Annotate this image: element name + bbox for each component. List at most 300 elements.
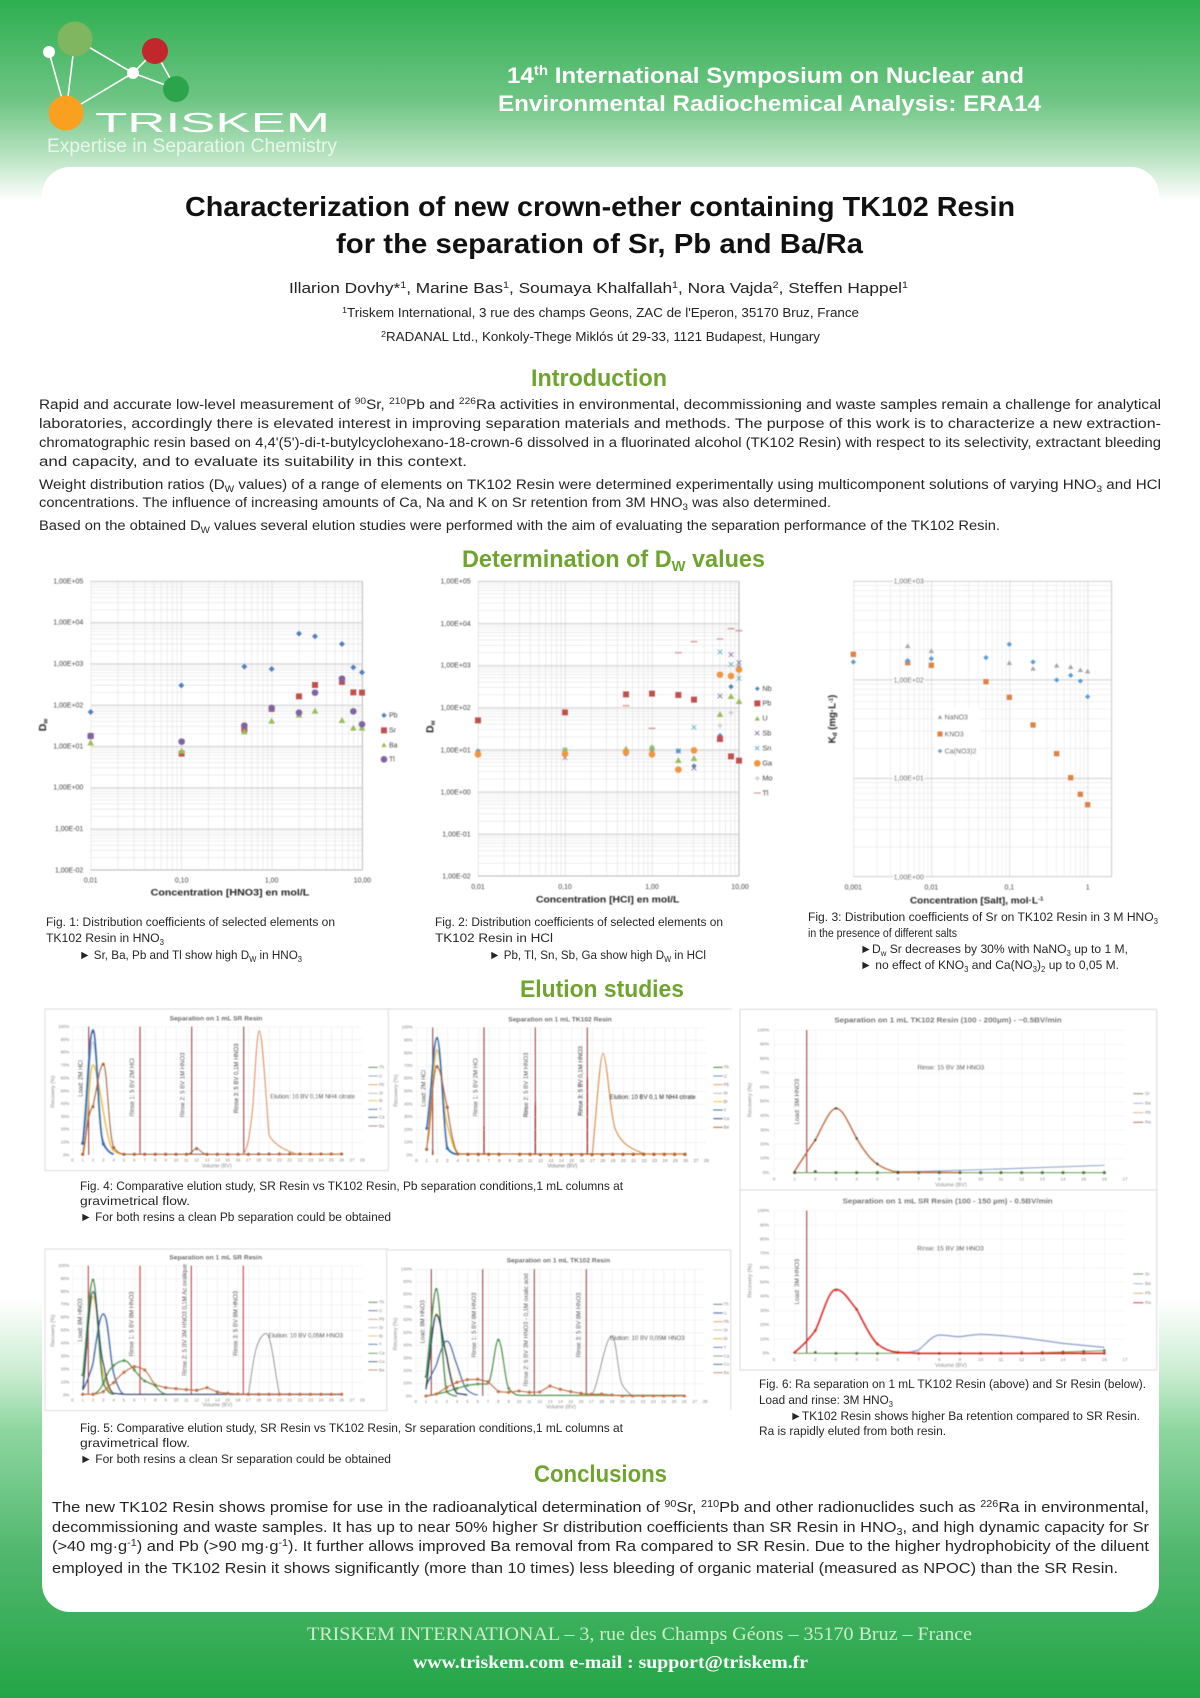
chart: figure 5 TK102 Resin Sr separation: 15	[568, 1399, 574, 1404]
conclusions text: employed in the TK102 Resin it shows significantly (more than 10 times) less bleeding of organic material (measured as NPOC) than the SR Resin.	[52, 1560, 1118, 1577]
authors and affiliations: Illarion Dovhy*	[289, 281, 382, 297]
chart: figure 1 HNO3 distribution: 10,00	[354, 878, 371, 885]
chart: figure 5 TK102 Resin Sr separation: Bi	[724, 1336, 728, 1341]
caption: figure 6: 3	[889, 1400, 894, 1409]
chart: figure 6 radium separation on two resins: 4	[855, 1176, 858, 1181]
chart: figure 5 TK102 Resin Sr separation: 40%	[403, 1343, 412, 1348]
chart: figure 3 salt influence: (mg·L	[827, 703, 838, 732]
chart: figure 5 TK102 Resin Sr separation: 20	[620, 1399, 625, 1404]
chart: figure 5 TK102 Resin Sr separation: 10%	[403, 1381, 412, 1386]
chart: figure 5 TK102 Resin Sr separation: Th	[724, 1302, 729, 1307]
chart: figure 3 salt influence: 0,01	[925, 884, 938, 891]
heading: Conclusions: Conclusions	[534, 1461, 667, 1488]
chart: figure 5 TK102 Resin Sr separation: 13	[548, 1399, 553, 1404]
caption: figure 5: Fig. 5: Comparative elution study, SR Resin vs TK102 Resin, Sr separation conditions,1 mL columns at	[80, 1421, 624, 1435]
chart: figure 4 TK102 Resin Pb separation: Load: 2M HCl	[422, 1070, 428, 1107]
symposium name: International Symposium on Nuclear and	[548, 63, 1024, 88]
chart: figure 1 HNO3 distribution	[38, 578, 398, 898]
authors and affiliations: 2	[381, 329, 386, 339]
chart: figure 6 radium separation on two resins: 15	[1081, 1176, 1087, 1181]
chart: figure 6 radium separation on two resins: Ba	[1145, 1281, 1151, 1286]
chart: figure 5 SR Resin Sr separation: 90%	[61, 1276, 69, 1281]
chart: figure 3 salt influence: -1	[829, 698, 835, 703]
introduction text: W	[201, 525, 210, 535]
chart: figure 4 TK102 Resin Pb separation: Volume (BV)	[547, 1164, 578, 1170]
chart: figure 6 radium separation on two resins: Recovery (%)	[748, 1083, 754, 1117]
introduction text	[39, 396, 1161, 535]
caption: figure 6: Ra is rapidly eluted from both resin.	[759, 1424, 946, 1438]
chart: figure 6 radium separation on two resins: Ra	[1145, 1120, 1151, 1125]
caption: figure 1: in HNO	[256, 948, 298, 962]
chart: figure 5 TK102 Resin Sr separation: 23	[651, 1399, 656, 1404]
chart: figure 5 TK102 Resin Sr separation: 80%	[403, 1292, 412, 1297]
chart: figure 5 TK102 Resin Sr separation: 1	[425, 1399, 428, 1404]
chart: figure 1 HNO3 distribution: 1,00E-02	[55, 867, 83, 874]
introduction text: Weight distribution ratios (D	[39, 477, 205, 492]
chart: figure 5 TK102 Resin Sr separation: Separation on 1 mL TK102 Resin	[507, 1257, 610, 1264]
chart: figure 5 TK102 Resin Sr separation: 60%	[403, 1317, 412, 1322]
chart: figure 4 TK102 Resin Pb separation: 5	[467, 1158, 470, 1163]
chart: figure 5 TK102 Resin Sr separation: Rinse 1: 5 BV 8M HNO3	[472, 1292, 478, 1357]
chart: figure 6 radium separation on two resins: 5	[876, 1357, 879, 1362]
chart: figure 4 TK102 Resin Pb separation: 50%	[404, 1089, 413, 1094]
conclusions text: Pb and other radionuclides such as	[719, 1499, 980, 1516]
chart: figure 5 TK102 Resin Sr separation: 4	[456, 1399, 459, 1404]
chart: figure 5 SR Resin Sr separation: U	[379, 1308, 382, 1313]
caption: figure 2: ► Pb, Tl, Sn, Sb, Ga show high D	[489, 948, 676, 962]
chart: figure 5 SR Resin Sr separation: 16	[236, 1397, 241, 1402]
chart: figure 4 TK102 Resin Pb separation: 4	[456, 1158, 459, 1163]
heading: Introduction: Introduction	[531, 365, 667, 392]
chart: figure 4 SR Resin Pb separation: 6	[133, 1157, 136, 1162]
caption: figure 3	[808, 910, 1159, 974]
chart: figure 1 HNO3 distribution: 1,00E-01	[55, 826, 83, 833]
chart: figure 1 HNO3 distribution: D	[38, 724, 49, 731]
caption: figure 5: ► For both resins a clean Sr separation could be obtained	[80, 1452, 391, 1466]
chart: figure 5 TK102 Resin Sr separation: 0%	[406, 1393, 412, 1398]
introduction text: values several elution studies were performed with the aim of evaluating the separation performance of the TK102 Resin.	[210, 518, 1000, 533]
chart: figure 5 TK102 Resin Sr separation: 25	[672, 1399, 677, 1404]
chart: figure 5 TK102 Resin Sr separation: Pb	[724, 1319, 730, 1324]
caption: figure 4: ► For both resins a clean Pb separation could be obtained	[80, 1210, 391, 1224]
symposium name: Environmental Radiochemical Analysis: ERA14	[498, 91, 1042, 116]
chart: figure 2 HCl distribution: Sn	[762, 744, 771, 753]
chart: figure 1 HNO3 distribution: w	[43, 719, 50, 725]
chart: figure 5 TK102 Resin Sr separation: 28	[703, 1399, 708, 1404]
chart: figure 6 radium separation on two resins: 14	[1060, 1357, 1066, 1362]
chart: figure 4 SR Resin Pb separation: 21	[287, 1157, 293, 1162]
chart: figure 1 HNO3 distribution: 1,00E+03	[53, 661, 83, 668]
chart: figure 4 TK102 Resin Pb separation: 20%	[404, 1127, 413, 1132]
chart: figure 4 SR Resin Pb separation: 7	[143, 1157, 146, 1162]
chart: figure 5 TK102 Resin Sr separation: 100%	[401, 1266, 412, 1271]
chart: figure 3 salt influence: 1,00E+03	[894, 578, 924, 585]
chart: figure 5 SR Resin Sr separation: 18	[256, 1397, 262, 1402]
chart: figure 6 radium separation on two resins: 6	[897, 1357, 900, 1362]
chart: figure 5 SR Resin Sr separation: 6	[133, 1397, 136, 1402]
chart: figure 4 SR Resin Pb separation: 9	[164, 1157, 167, 1162]
chart: figure 5 SR Resin Sr separation: 28	[360, 1397, 365, 1402]
caption: figure 3: 3	[1033, 965, 1038, 974]
chart: figure 6 radium separation on two resins: 4	[855, 1357, 858, 1362]
chart: figure 5 TK102 Resin Sr separation: U	[724, 1310, 727, 1315]
chart: figure 6 radium separation on two resins: 10%	[760, 1336, 769, 1341]
chart: figure 1 HNO3 distribution: Sr	[389, 728, 397, 735]
chart: figure 5 TK102 Resin Sr separation: 0	[414, 1399, 417, 1404]
chart: figure 6 radium separation on two resins: 0	[773, 1357, 776, 1362]
chart: figure 5 SR Resin Sr separation: 80%	[61, 1289, 69, 1294]
caption: figure 1: ► Sr, Ba, Pb and Tl show high D	[79, 948, 260, 962]
chart: figure 5 TK102 Resin Sr separation: 90%	[403, 1279, 412, 1284]
chart: figure 6 radium separation on two resins: 1	[793, 1176, 796, 1181]
chart: figure 5 TK102 Resin Sr separation: 5	[466, 1399, 469, 1404]
introduction text: and HCl	[1102, 477, 1161, 492]
chart: figure 5 TK102 Resin Sr separation: 18	[599, 1399, 605, 1404]
chart: figure 4 TK102 Resin Pb separation: 16	[580, 1158, 585, 1163]
caption: figure 1: 3	[298, 955, 303, 964]
caption: figure 3: )	[1037, 958, 1041, 972]
chart: figure 4 TK102 Resin Pb separation: Elution: 10 BV 0,1 M NH4 citrate	[610, 1095, 696, 1101]
chart: figure 4 SR Resin Pb separation: Separation on 1 mL SR Resin	[170, 1015, 262, 1022]
chart: figure 5 SR Resin Sr separation: Rinse 2: 5 BV 3M HNO3 0,1M Ac oxalique	[182, 1263, 188, 1376]
chart: figure 1 HNO3 distribution: 0,10	[175, 878, 189, 885]
chart: figure 6 radium separation on two resins: 7	[917, 1176, 920, 1181]
chart: figure 6 radium separation on two resins: 7	[917, 1357, 920, 1362]
chart: figure 4 SR Resin Pb separation: 19	[267, 1157, 272, 1162]
chart: figure 6 radium separation on two resins: 100%	[757, 1208, 769, 1213]
chart: figure 6 radium separation on two resins: 1	[793, 1357, 796, 1362]
caption: figure 1: W	[249, 955, 257, 964]
caption: figure 1: 3	[160, 938, 165, 947]
chart: figure 5 SR Resin Sr separation: 50%	[61, 1328, 69, 1333]
chart: figure 4 TK102 Resin Pb separation	[388, 1009, 732, 1171]
chart: figure 4 TK102 Resin Pb separation: 7	[487, 1158, 490, 1163]
chart: figure 5 TK102 Resin Sr separation: 12	[537, 1399, 543, 1404]
chart: figure 5 SR Resin Sr separation: 8	[154, 1397, 157, 1402]
chart: figure 5 SR Resin Sr separation: 22	[298, 1397, 303, 1402]
chart: figure 4 SR Resin Pb separation: Recovery (%)	[51, 1075, 57, 1108]
chart: figure 5 TK102 Resin Sr separation: Volume (BV)	[546, 1405, 576, 1411]
chart: figure 6 radium separation on two resins: Separation on 1 mL TK102 Resin (100 - 200µm) - ~0.5BV/min	[834, 1016, 1062, 1025]
chart: figure 5 TK102 Resin Sr separation: 9	[507, 1399, 510, 1404]
chart: figure 4 TK102 Resin Pb separation: 70%	[404, 1063, 413, 1068]
chart: figure 4 TK102 Resin Pb separation: 90%	[404, 1037, 413, 1042]
caption: figure 3: Fig. 3: Distribution coefficients of Sr on TK102 Resin in 3 M HNO	[808, 910, 1163, 924]
symposium name: th	[534, 62, 548, 78]
chart: figure 3 salt influence: NaNO3	[945, 715, 968, 722]
caption: figure 3: ► no effect of KNO	[860, 958, 967, 972]
chart: figure 6 radium separation on two resins: 9	[959, 1176, 962, 1181]
chart: figure 5 TK102 Resin Sr separation: Recovery (%)	[393, 1318, 399, 1350]
chart: figure 6 radium separation on two resins: 30%	[760, 1308, 769, 1313]
introduction text: 3	[683, 502, 688, 512]
caption: figure 3: up to 0,05 M.	[1045, 958, 1119, 972]
chart: figure 4 SR Resin Pb separation: 100%	[58, 1024, 69, 1029]
chart: figure 1 HNO3 distribution: Ba	[389, 742, 398, 749]
caption: figure 6: Fig. 6: Ra separation on 1 mL TK102 Resin (above) and Sr Resin (below).	[759, 1377, 1146, 1391]
chart: figure 4 TK102 Resin Pb separation: 2	[436, 1158, 439, 1163]
chart: figure 2 HCl distribution: U	[762, 714, 768, 723]
chart: figure 3 salt influence: -1	[1038, 897, 1043, 903]
chart: figure 4 SR Resin Pb separation: 12	[194, 1157, 200, 1162]
chart: figure 5 SR Resin Sr separation: 11	[184, 1397, 189, 1402]
conclusions text: The new TK102 Resin shows promise for use in the radioanalytical determination of	[52, 1499, 614, 1516]
chart: figure 2 HCl distribution: Sb	[762, 729, 771, 738]
chart: figure 6 radium separation on two resins: 16	[1102, 1357, 1107, 1362]
chart: figure 5 TK102 Resin Sr separation: 26	[682, 1399, 687, 1404]
chart: figure 4 TK102 Resin Pb separation: Y	[724, 1107, 727, 1112]
chart: figure 4 TK102 Resin Pb separation: U	[724, 1073, 727, 1078]
chart: figure 4 SR Resin Pb separation: Y	[379, 1107, 382, 1112]
chart: figure 4 SR Resin Pb separation: 14	[215, 1157, 220, 1162]
caption: figure 2: in HCl	[671, 948, 706, 962]
chart: figure 4 SR Resin Pb separation: 50%	[61, 1088, 69, 1093]
chart: figure 4 SR Resin Pb separation	[45, 1009, 388, 1171]
caption: figure 3: and Ca(NO	[968, 958, 1033, 972]
chart: figure 4 TK102 Resin Pb separation: Rinse 3: 5 BV 0,1M HNO3	[578, 1045, 584, 1116]
chart: figure 5 SR Resin Sr separation: 24	[319, 1397, 324, 1402]
chart: figure 3 salt influence: Ca(NO3)2	[945, 749, 977, 756]
chart: figure 6 radium separation on two resins: 60%	[760, 1265, 769, 1270]
introduction text: Ra activities in environmental, decommissioning and waste samples remain a challenge for analytical	[476, 397, 1161, 412]
chart: figure 5 TK102 Resin Sr separation: 20%	[403, 1368, 412, 1373]
chart: figure 6 radium separation on two resins: 10%	[760, 1156, 769, 1161]
introduction text: 226	[459, 396, 476, 406]
chart: figure 6 radium separation on two resins: 0%	[763, 1170, 769, 1175]
chart: figure 2 HCl distribution: 1,00E-02	[442, 873, 471, 880]
caption: figure 4	[80, 1179, 624, 1224]
footer contact details	[307, 1624, 972, 1672]
chart: figure 5 SR Resin Sr separation: 0%	[63, 1392, 69, 1397]
chart: figure 4 SR Resin Pb separation: 28	[360, 1157, 365, 1162]
chart: figure 6 radium separation on two resins: 12	[1019, 1176, 1025, 1181]
chart: figure 5 SR Resin Sr separation: Sr	[379, 1325, 384, 1330]
chart: figure 6 radium separation on two resins: 80%	[760, 1237, 769, 1242]
chart: figure 5 SR Resin Sr separation: Elution: 10 BV 0,05M HNO3	[268, 1334, 344, 1340]
caption: figure 3: 2	[1041, 965, 1046, 974]
chart: figure 4 SR Resin Pb separation: 4	[112, 1157, 115, 1162]
chart: figure 4 SR Resin Pb separation: 22	[298, 1157, 303, 1162]
chart: figure 2 HCl distribution: Concentration [HCl] en mol/L	[536, 895, 680, 905]
chart: figure 6 radium separation on two resins: 17	[1122, 1357, 1128, 1362]
chart: figure 4 SR Resin Pb separation: 80%	[61, 1050, 69, 1055]
chart: figure 5 SR Resin Sr separation: 40%	[61, 1341, 69, 1346]
chart: figure 4 SR Resin Pb separation: U	[379, 1073, 382, 1078]
chart: figure 3 salt influence: 1,00E+01	[894, 776, 924, 783]
chart: figure 5 TK102 Resin Sr separation: 30%	[403, 1355, 412, 1360]
caption: figure 4: gravimetrical flow.	[80, 1194, 190, 1208]
chart: figure 6 radium separation on two resins: Separation on 1 mL SR Resin (100 - 150 µm) - 0.5BV/min	[843, 1196, 1053, 1205]
chart: figure 4 SR Resin Pb separation: 30%	[61, 1114, 69, 1119]
chart: figure 6 radium separation on two resins: Sr	[1145, 1271, 1150, 1276]
conclusions text: Ra in environmental,	[998, 1499, 1149, 1516]
introduction text: laboratories, accordingly there is elevated interest in improving separation materials and methods. The purpose of this work is to characterize a new extraction-	[39, 416, 1161, 431]
chart: figure 5 SR Resin Sr separation: 19	[267, 1397, 272, 1402]
chart: figure 1 HNO3 distribution: 1,00E+04	[53, 620, 83, 627]
introduction text: W	[225, 484, 235, 494]
chart: figure 4 TK102 Resin Pb separation: 17	[590, 1158, 595, 1163]
chart: figure 4 TK102 Resin Pb separation: 15	[569, 1158, 575, 1163]
chart: figure 6 radium separation on two resins: 70%	[760, 1070, 769, 1075]
chart: figure 6 radium separation on two resins: 0%	[763, 1351, 769, 1356]
chart: figure 5 TK102 Resin Sr separation: 16	[579, 1399, 584, 1404]
chart: figure 2 HCl distribution: 1,00E-01	[442, 831, 471, 838]
chart: figure 4 TK102 Resin Pb separation: 27	[694, 1158, 699, 1163]
chart: figure 6 radium separation on two resins: 11	[999, 1176, 1004, 1181]
chart: figure 6 radium separation on two resins: 3	[835, 1357, 838, 1362]
chart: figure 5 SR Resin Sr separation: Cu	[379, 1359, 385, 1364]
chart: figure 4 TK102 Resin Pb separation: 1	[425, 1158, 428, 1163]
chart: figure 4 TK102 Resin Pb separation: Sr	[724, 1091, 729, 1096]
chart: figure 1 HNO3 distribution: Pb	[389, 713, 398, 720]
logo: Triskem: TRISKEM	[95, 107, 330, 138]
caption: figure 3: ►D	[860, 942, 881, 956]
conclusions text: 90	[664, 1499, 677, 1510]
chart: figure 6 radium separation on two resins: 3	[835, 1176, 838, 1181]
chart: figure 6 radium separation on two resins: 0	[773, 1176, 776, 1181]
chart: figure 3 salt influence: KNO3	[945, 732, 964, 739]
chart: figure 4 TK102 Resin Pb separation: 0	[415, 1158, 418, 1163]
chart: figure 4 TK102 Resin Pb separation: 11	[528, 1158, 533, 1163]
chart: figure 5 SR Resin Sr separation: 17	[246, 1397, 251, 1402]
authors and affiliations: , Soumaya Khalfallah	[509, 281, 672, 297]
chart: figure 6 radium separation on two resins: Ba	[1145, 1101, 1151, 1106]
chart: figure 6 radium separation on two resins: 14	[1060, 1176, 1066, 1181]
chart: figure 4 TK102 Resin Pb separation: 0%	[406, 1152, 413, 1157]
chart: figure 3 salt influence: d	[832, 732, 839, 736]
chart: figure 6 radium separation on two resins: Pb	[1145, 1110, 1151, 1115]
authors and affiliations: 1	[400, 280, 406, 290]
conclusions text: -1	[127, 1538, 137, 1549]
chart: figure 4 SR Resin Pb separation: 8	[154, 1157, 157, 1162]
chart: figure 4 TK102 Resin Pb separation: Pb	[724, 1082, 730, 1087]
chart: figure 6 radium separation on two resins: 50%	[760, 1279, 769, 1284]
caption: figure 4: Fig. 4: Comparative elution study, SR Resin vs TK102 Resin, Pb separation conditions,1 mL columns at	[80, 1179, 624, 1193]
chart: figure 3 salt influence: 0,001	[845, 884, 862, 891]
chart: figure 4 SR Resin Pb separation: 23	[308, 1157, 314, 1162]
chart: figure 5 SR Resin Sr separation: Rinse 1: 5 BV 8M HNO3	[130, 1291, 136, 1356]
chart: figure 5 TK102 Resin Sr separation: Elution: 10 BV 0,05M HNO3	[610, 1336, 685, 1342]
chart: figure 5 TK102 Resin Sr separation: 22	[641, 1399, 646, 1404]
chart: figure 6 radium separation on two resins: 2	[814, 1357, 817, 1362]
footer contact details: www.triskem.com e-mail : support@triskem.fr	[413, 1652, 808, 1672]
chart: figure 6 radium separation on two resins: 50%	[760, 1099, 769, 1104]
chart: figure 6 radium separation on two resins: Rinse: 15 BV 3M HNO3	[917, 1065, 985, 1072]
chart: figure 5 TK102 Resin Sr separation: 21	[630, 1399, 636, 1404]
chart: figure 6 radium separation on two resins: 20%	[760, 1141, 769, 1146]
footer contact details: TRISKEM INTERNATIONAL – 3, rue des Champs Géons – 35170 Bruz – France	[307, 1624, 972, 1645]
title: Characterization of new crown-ether containing TK102 Resin	[185, 191, 1015, 222]
chart: figure 5 TK102 Resin Sr separation: Y	[724, 1345, 727, 1350]
chart: figure 6 radium separation on two resins: Recovery (%)	[748, 1263, 754, 1298]
chart: figure 2 HCl distribution: Tl	[762, 788, 769, 797]
caption: figure 1	[46, 915, 335, 964]
chart: figure 4 SR Resin Pb separation: 20%	[61, 1127, 69, 1132]
chart: figure 5 TK102 Resin Sr separation: 7	[487, 1399, 490, 1404]
chart: figure 4 SR Resin Pb separation: Ca	[379, 1115, 385, 1120]
chart: figure 1 HNO3 distribution: 1,00	[265, 878, 279, 885]
symposium name: 14	[507, 63, 532, 88]
authors and affiliations: 2	[773, 280, 779, 290]
heading: Determination of Dw values: values	[686, 546, 765, 573]
caption: figure 2: W	[664, 955, 672, 964]
chart: figure 5 SR Resin Sr separation: 9	[164, 1397, 167, 1402]
chart: figure 5 TK102 Resin Sr separation: Load: 8M HNO3	[421, 1299, 427, 1343]
chart: figure 5 SR Resin Sr separation: Recovery (%)	[51, 1314, 57, 1347]
chart: figure 3 salt influence	[827, 578, 1112, 905]
authors and affiliations: , Marine Bas	[406, 281, 503, 297]
chart: figure 5 SR Resin Sr separation: 25	[329, 1397, 334, 1402]
chart: figure 2 HCl distribution: 0,10	[558, 884, 572, 891]
chart: figure 2 HCl distribution: 1,00E+04	[441, 621, 471, 628]
chart: figure 5 TK102 Resin Sr separation: 14	[558, 1399, 563, 1404]
chart: figure 4 TK102 Resin Pb separation: 25	[673, 1158, 678, 1163]
chart: figure 5 SR Resin Sr separation: Y	[379, 1342, 382, 1347]
authors and affiliations: , Nora Vajda	[678, 281, 774, 297]
chart: figure 6 radium separation on two resins: 100%	[757, 1027, 769, 1032]
introduction text: Pb and	[406, 397, 459, 412]
chart: figure 4 SR Resin Pb separation: 26	[339, 1157, 345, 1162]
chart: figure 5 SR Resin Sr separation: 5	[123, 1397, 126, 1402]
chart: figure 4 TK102 Resin Pb separation: 21	[631, 1158, 637, 1163]
chart: figure 1 HNO3 distribution: 1,00E+02	[53, 702, 83, 709]
chart: figure 2 HCl distribution: 10,00	[731, 884, 749, 891]
chart: figure 5 TK102 Resin Sr separation: 10	[517, 1399, 522, 1404]
chart: figure 4 TK102 Resin Pb separation: 23	[652, 1158, 658, 1163]
chart: figure 6 radium separation on two resins: Volume (BV)	[935, 1182, 967, 1188]
chart: figure 6 radium separation on two resins: 40%	[760, 1113, 769, 1118]
chart: figure 4 SR Resin Pb separation: Load: 2M HCl	[78, 1060, 84, 1097]
authors and affiliations	[289, 280, 908, 344]
introduction text: Sr,	[366, 397, 389, 412]
chart: figure 2 HCl distribution: 0,01	[471, 884, 485, 891]
heading: Elution studies: Elution studies	[520, 976, 684, 1003]
chart: figure 6 radium separation on two resins: 5	[876, 1176, 879, 1181]
chart: figure 2 HCl distribution: 1,00E+05	[441, 578, 471, 585]
caption: figure 5	[80, 1421, 624, 1466]
chart: figure 4 SR Resin Pb separation: 25	[329, 1157, 334, 1162]
chart: figure 6 radium separation on two resins: 8	[938, 1176, 941, 1181]
caption: figure 3: Sr decreases by 30% with NaNO	[886, 942, 1067, 956]
introduction text: Rapid and accurate low-level measurement of	[39, 397, 314, 412]
chart: figure 4 TK102 Resin Pb separation: 8	[498, 1158, 501, 1163]
chart: figure 6 radium separation on two resins: Volume (BV)	[935, 1363, 967, 1369]
chart: figure 2 HCl distribution: 1,00E+00	[441, 789, 471, 796]
chart: figure 5 TK102 Resin Sr separation: 24	[661, 1399, 667, 1404]
conclusions text: ). It further allows improved Ba removal from Ra compared to SR Resin. Due to the higher hydrophobicity of the diluent	[288, 1538, 1150, 1555]
introduction text: chromatographic resin based on 4,4'(5')-di-t-butylcyclohexano-18-crown-6 dissolved in a fluorinated alcohol (TK102 Resin) with respect to its selectivity, extractant bleeding	[39, 435, 1161, 450]
authors and affiliations: 1	[902, 280, 908, 290]
chart: figure 4 SR Resin Pb separation: 27	[350, 1157, 355, 1162]
chart: figure 5 TK102 Resin Sr separation: Ca	[724, 1353, 730, 1358]
conclusions text: (>40 mg·g	[52, 1538, 122, 1555]
chart: figure 5 TK102 Resin Sr separation: 50%	[403, 1330, 412, 1335]
chart: figure 4 SR Resin Pb separation: Elution: 10 BV 0,1M NH4 citrate	[270, 1094, 356, 1100]
chart: figure 5 SR Resin Sr separation: 14	[215, 1397, 220, 1402]
chart: figure 4 SR Resin Pb separation: Sr	[379, 1091, 384, 1096]
chart: figure 3 salt influence: 1,00E+00	[894, 874, 924, 881]
chart: figure 4 SR Resin Pb separation: 13	[205, 1157, 210, 1162]
chart: figure 6 radium separation on two resins: 90%	[760, 1222, 769, 1227]
chart: figure 4 TK102 Resin Pb separation: 10%	[404, 1140, 413, 1145]
conclusions text: , and high dynamic capacity for Sr	[903, 1519, 1149, 1536]
chart: figure 5 TK102 Resin Sr separation: 27	[692, 1399, 698, 1404]
chart: figure 6 radium separation on two resins: 80%	[760, 1056, 769, 1061]
introduction text: 3	[1096, 484, 1102, 494]
chart: figure 4 TK102 Resin Pb separation: 30%	[404, 1114, 413, 1119]
chart: figure 1 HNO3 distribution: Concentration [HNO3] en mol/L	[151, 888, 310, 898]
title	[185, 191, 1015, 259]
